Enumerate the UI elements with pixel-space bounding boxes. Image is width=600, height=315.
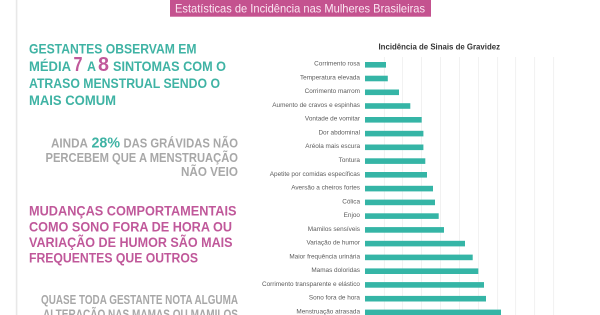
header banner: Estatísticas de Incidência nas Mulheres Brasileiras — [175, 2, 425, 16]
text block: 7 a 8 symptoms: 7 — [74, 54, 82, 76]
category labels: Dor abdominal — [318, 130, 360, 136]
category labels: Temperatura elevada — [300, 74, 360, 82]
bars — [365, 62, 501, 315]
text block: 7 a 8 symptoms: GESTANTES OBSERVAM EM — [29, 42, 196, 57]
text block: 7 a 8 symptoms: 8 — [98, 54, 109, 76]
category labels: Enjoo — [344, 212, 360, 219]
category labels: Variação de humor — [306, 240, 361, 247]
text block: 7 a 8 symptoms: SINTOMAS COM O — [113, 59, 226, 74]
category labels: Aumento de cravos e espinhas — [272, 102, 360, 109]
category labels: Maior frequência urinária — [289, 253, 360, 260]
text block: 7 a 8 symptoms: A — [87, 59, 96, 74]
category labels: Sono fora de hora — [309, 295, 360, 302]
category labels: Corrimento transparente e elástico — [262, 281, 360, 288]
bar chart: pregnancy signs — [262, 43, 554, 315]
category labels: Cólica — [342, 198, 360, 205]
text block: 7 a 8 symptoms — [29, 42, 226, 108]
text block: behavioural changes — [29, 204, 237, 266]
text block: behavioural changes: COMO SONO FORA DE HORA OU — [29, 219, 232, 234]
text block: behavioural changes: FREQUENTES QUE OUTROS — [29, 251, 198, 266]
category labels: Vontade de vomitar — [305, 116, 361, 123]
category labels: Aversão a cheiros fortes — [291, 184, 360, 192]
chart title: Incidência de Sinais de Gravidez — [378, 43, 500, 52]
text block: 28% did not notice — [46, 135, 238, 179]
text block: 28% did not notice: AINDA — [51, 135, 89, 150]
text block: behavioural changes: VARIAÇÃO DE HUMOR SÃO MAIS — [29, 235, 233, 250]
text block: behavioural changes: MUDANÇAS COMPORTAMENTAIS — [29, 204, 237, 219]
category labels: Mamilos sensíveis — [308, 226, 360, 233]
text block: 7 a 8 symptoms: MAIS COMUM — [29, 93, 116, 108]
text block: 7 a 8 symptoms: ATRASO MENSTRUAL SENDO O — [29, 76, 220, 91]
text block: 28% did not notice: NÃO VEIO — [181, 164, 238, 179]
text block: 28% did not notice: PERCEBEM QUE A MENSTRUAÇÃO — [46, 150, 238, 165]
category labels: Corrimento marrom — [305, 88, 360, 95]
category labels — [262, 61, 361, 315]
text block: 28% did not notice: 28% — [92, 135, 120, 151]
text block: breast changes: QUASE TODA GESTANTE NOTA ALGUMA — [41, 292, 238, 307]
category labels: Apetite por comidas específicas — [270, 171, 360, 178]
category labels: Corrimento rosa — [314, 61, 360, 68]
category labels: Aréola mais escura — [305, 143, 360, 150]
text block: 28% did not notice: DAS GRÁVIDAS NÃO — [124, 135, 238, 150]
text block: breast changes — [41, 292, 238, 315]
category labels: Tontura — [339, 157, 360, 164]
category labels: Mamas doloridas — [311, 267, 360, 274]
text block: 7 a 8 symptoms: MÉDIA — [29, 59, 71, 74]
